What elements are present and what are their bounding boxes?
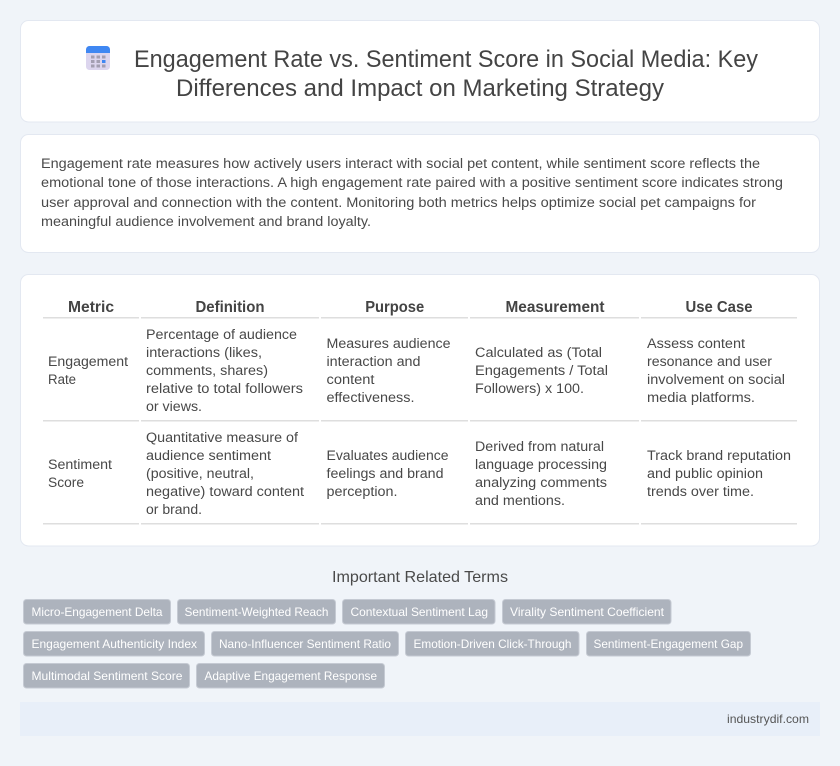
table row: engagement rate: or views. bbox=[146, 399, 202, 415]
tag: Multimodal Sentiment Score bbox=[32, 669, 183, 683]
tag: Contextual Sentiment Lag bbox=[350, 605, 488, 619]
tag: Sentiment-Weighted Reach bbox=[184, 605, 328, 619]
tag: Emotion-Driven Click-Through bbox=[414, 637, 572, 651]
icon: calendar grid bbox=[86, 46, 110, 70]
tag: Nano-Influencer Sentiment Ratio bbox=[219, 637, 391, 651]
table row: sentiment score: Derived from natural bbox=[475, 439, 604, 455]
table row: engagement rate: media platforms. bbox=[647, 390, 755, 406]
table row: sentiment score: Sentiment bbox=[48, 457, 112, 473]
panel: intro paragraph bbox=[20, 134, 820, 252]
table row: engagement rate: comments, shares) bbox=[146, 363, 268, 379]
table header row: Metric bbox=[68, 299, 114, 316]
table row: engagement rate: interactions (likes, bbox=[146, 345, 262, 361]
table row: engagement rate: Followers) x 100. bbox=[475, 381, 584, 397]
table header row bbox=[68, 299, 753, 316]
table row: sentiment score: audience sentiment bbox=[146, 448, 271, 464]
table header row: Purpose bbox=[365, 299, 424, 316]
tag bbox=[342, 600, 495, 624]
title bbox=[134, 46, 759, 102]
tag bbox=[212, 632, 398, 656]
tag: Virality Sentiment Coefficient bbox=[510, 605, 665, 619]
panel: related term tags bbox=[24, 600, 750, 688]
table row: engagement rate: Rate bbox=[48, 372, 76, 388]
tag: Micro-Engagement Delta bbox=[32, 605, 163, 619]
table row: sentiment score: (positive, neutral, bbox=[146, 466, 254, 482]
tag: Adaptive Engagement Response bbox=[204, 669, 377, 683]
table row: engagement rate: effectiveness. bbox=[326, 390, 414, 406]
table row: engagement rate: involvement on social bbox=[647, 372, 785, 388]
panel: footer bbox=[20, 702, 820, 736]
table row: sentiment score: Score bbox=[48, 475, 84, 491]
table row: engagement rate: resonance and user bbox=[647, 354, 772, 370]
tag bbox=[24, 664, 190, 688]
title: Differences and Impact on Marketing Strategy bbox=[176, 75, 665, 102]
panel: title card bbox=[20, 20, 820, 122]
tag bbox=[24, 632, 204, 656]
intro text: Engagement rate measures how actively users interact with social pet content, while sentiment score reflects the bbox=[41, 156, 760, 172]
table row: sentiment score: perception. bbox=[326, 484, 398, 500]
intro text: user approval and connection with the content. Monitoring both metrics helps optimize social pet campaigns for bbox=[41, 195, 756, 211]
tag bbox=[24, 600, 170, 624]
table row: sentiment score bbox=[48, 430, 791, 518]
tag bbox=[406, 632, 579, 656]
table row: sentiment score: Evaluates audience bbox=[326, 448, 449, 464]
intro text: meaningful audience involvement and brand loyalty. bbox=[41, 214, 371, 230]
table row: engagement rate: Engagements / Total bbox=[475, 363, 608, 379]
table header row: Use Case bbox=[686, 299, 753, 316]
table row: engagement rate: relative to total followers bbox=[146, 381, 303, 397]
table row: engagement rate: content bbox=[326, 372, 375, 388]
tag: Sentiment-Engagement Gap bbox=[594, 637, 743, 651]
panel: comparison table bbox=[20, 274, 820, 546]
table row: sentiment score: language processing bbox=[475, 457, 607, 473]
tag bbox=[502, 600, 671, 624]
table row: engagement rate: Calculated as (Total bbox=[475, 345, 602, 361]
table row: sentiment score: and public opinion bbox=[647, 466, 763, 482]
table row: engagement rate: Percentage of audience bbox=[146, 327, 297, 343]
table row: engagement rate: Assess content bbox=[647, 336, 745, 352]
table header row: Measurement bbox=[506, 299, 605, 316]
table row: engagement rate: interaction and bbox=[326, 354, 420, 370]
intro text bbox=[41, 156, 783, 230]
heading: important related terms: Important Related Terms bbox=[332, 569, 508, 586]
table row: sentiment score: negative) toward content bbox=[146, 484, 304, 500]
table row: sentiment score: or brand. bbox=[146, 502, 202, 518]
table row: sentiment score: feelings and brand bbox=[326, 466, 444, 482]
table header row: Definition bbox=[196, 299, 264, 316]
tag bbox=[178, 600, 336, 624]
title: Engagement Rate vs. Sentiment Score in Social Media: Key bbox=[134, 46, 759, 73]
table row: engagement rate: Engagement bbox=[48, 354, 128, 370]
table row: sentiment score: trends over time. bbox=[647, 484, 754, 500]
intro text: emotional tone of those interactions. A high engagement rate paired with a positive sentiment score indicates strong bbox=[41, 175, 783, 191]
tag bbox=[196, 664, 384, 688]
table row: sentiment score: Track brand reputation bbox=[647, 448, 791, 464]
table row: sentiment score: analyzing comments bbox=[475, 475, 607, 491]
table row: sentiment score: and mentions. bbox=[475, 493, 565, 509]
table row: sentiment score: Quantitative measure of bbox=[146, 430, 298, 446]
table row: engagement rate: Measures audience bbox=[326, 336, 451, 352]
footer source text: industrydif.com bbox=[727, 712, 809, 726]
tag bbox=[586, 632, 750, 656]
table row: engagement rate bbox=[48, 327, 785, 415]
tag: Engagement Authenticity Index bbox=[32, 637, 197, 651]
